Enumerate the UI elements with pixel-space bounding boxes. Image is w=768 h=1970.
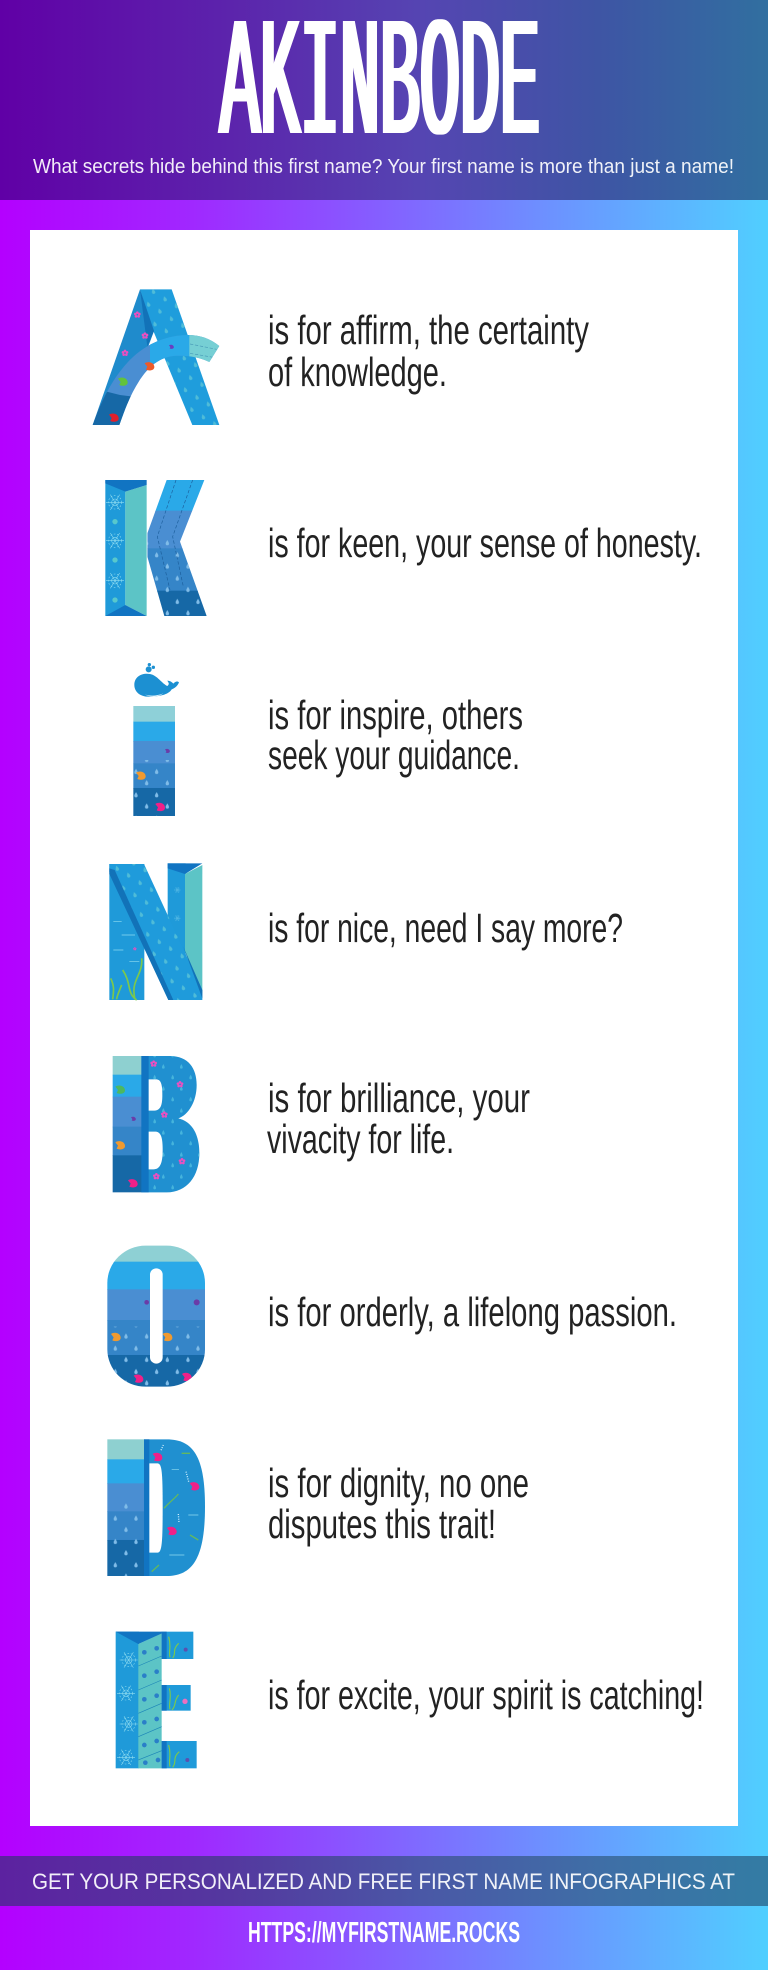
text: D: is for dignity, no one [268,1460,529,1506]
subtitle: What secrets hide behind this first name? Your first name is more than just a name! [33,156,734,178]
text: A [268,307,589,395]
letter B illustration [113,1056,199,1192]
text: D [268,1460,529,1547]
text: A: of knowledge. [268,349,447,395]
text: I [268,692,523,778]
text: I: seek your guidance. [268,732,520,778]
header band [0,0,768,200]
letter K illustration [105,478,210,617]
text: B [267,1075,530,1162]
letter N illustration [109,863,202,1000]
text: B: vivacity for life. [267,1116,454,1162]
white panel [30,230,738,1826]
letter E illustration [116,1632,197,1768]
letter D illustration [107,1439,205,1576]
letter A illustration [90,289,223,430]
text: A: is for affirm, the certainty [268,307,589,353]
footer band [0,1856,768,1906]
letter I illustration with whale [133,663,179,816]
text: I: is for inspire, others [268,692,523,738]
icon: whale [134,663,179,697]
text: N: is for nice, need I say more? [268,905,623,951]
letter O illustration [107,1245,207,1387]
text: B: is for brilliance, your [268,1075,530,1121]
text: D: disputes this trait! [268,1501,496,1547]
footer url: HTTPS://MYFIRSTNAME.ROCKS [248,1917,520,1949]
